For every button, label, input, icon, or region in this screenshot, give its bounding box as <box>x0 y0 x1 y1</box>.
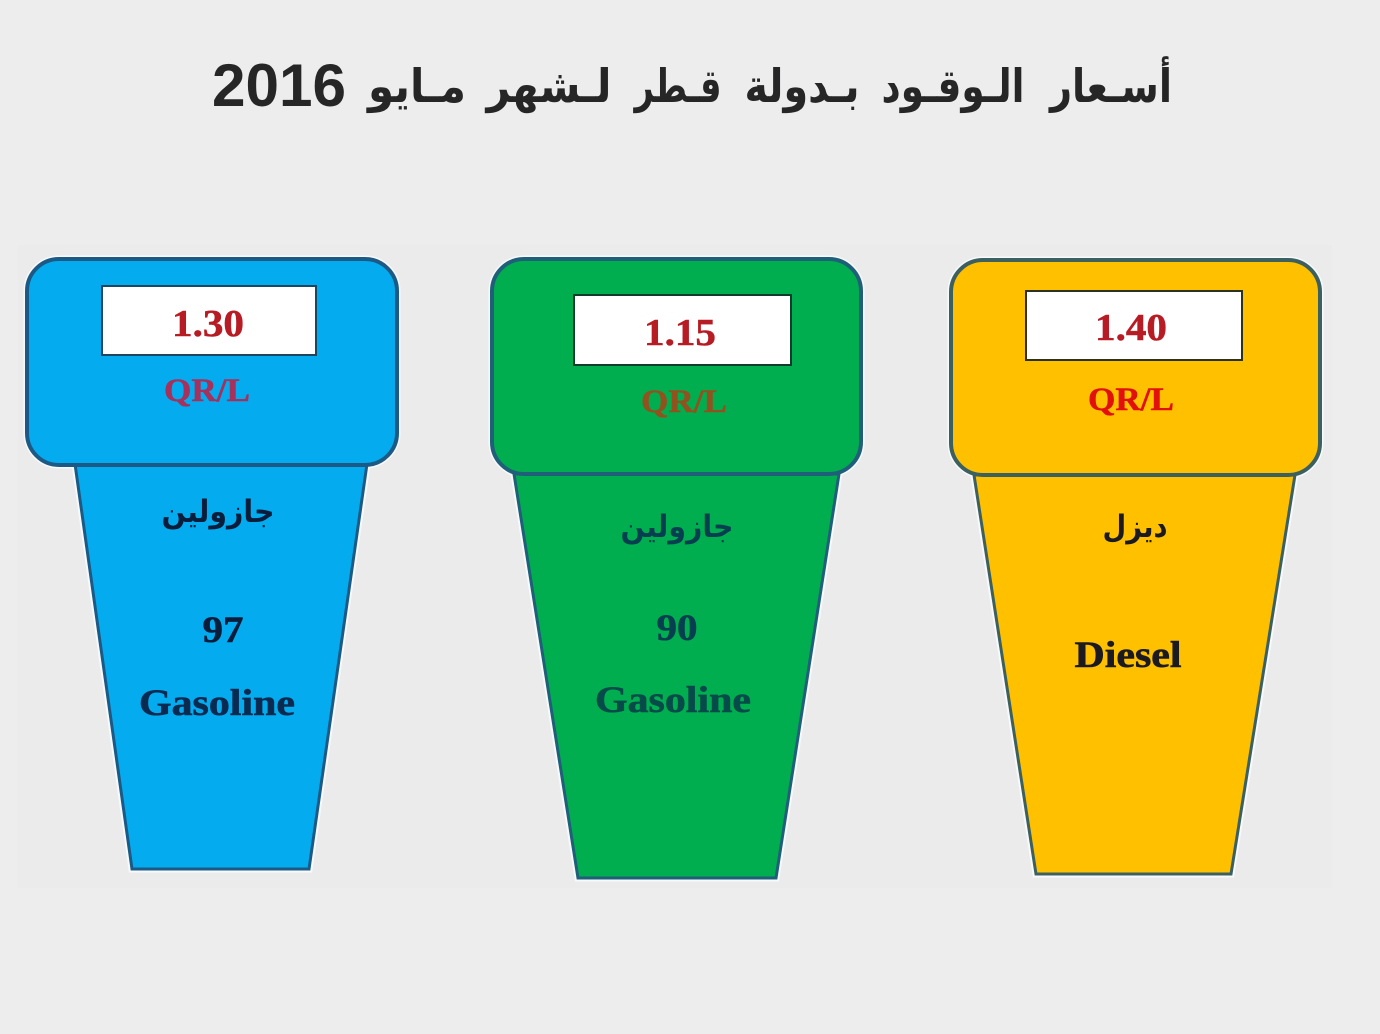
unit: QR/L <box>641 384 727 420</box>
price: 1.30 <box>172 303 244 345</box>
pump body <box>974 475 1295 874</box>
unit: QR/L <box>164 373 250 409</box>
pump body <box>75 464 367 869</box>
english label: Diesel <box>1074 635 1182 676</box>
english label: Gasoline <box>595 680 751 721</box>
title <box>212 52 1172 119</box>
pump head <box>492 259 861 474</box>
price: 1.40 <box>1095 307 1167 349</box>
price: 1.15 <box>644 312 716 354</box>
arabic label: جازولين <box>620 509 734 545</box>
pump head <box>951 260 1320 475</box>
title: مـايو <box>366 60 466 113</box>
pump head <box>27 259 397 465</box>
title: أسـعار <box>1048 56 1172 113</box>
unit: QR/L <box>1088 382 1174 418</box>
title: بـدولة <box>744 60 860 113</box>
english label: Gasoline <box>139 683 295 724</box>
arabic label: جازولين <box>162 494 274 530</box>
panel: diesel <box>951 260 1320 874</box>
panel: gasoline 90 <box>492 259 861 878</box>
pump body <box>514 474 839 878</box>
price box <box>1026 291 1242 360</box>
price box <box>102 286 316 355</box>
title: 2016 <box>212 52 346 119</box>
grade: 97 <box>202 610 244 651</box>
arabic label: ديزل <box>1102 509 1168 545</box>
title: قـطر <box>633 60 722 113</box>
title: الـوقـود <box>882 60 1024 113</box>
title: لـشهر <box>485 60 612 113</box>
grade: 90 <box>656 608 698 649</box>
price box <box>574 295 791 365</box>
panel: gasoline 97 <box>27 259 397 869</box>
